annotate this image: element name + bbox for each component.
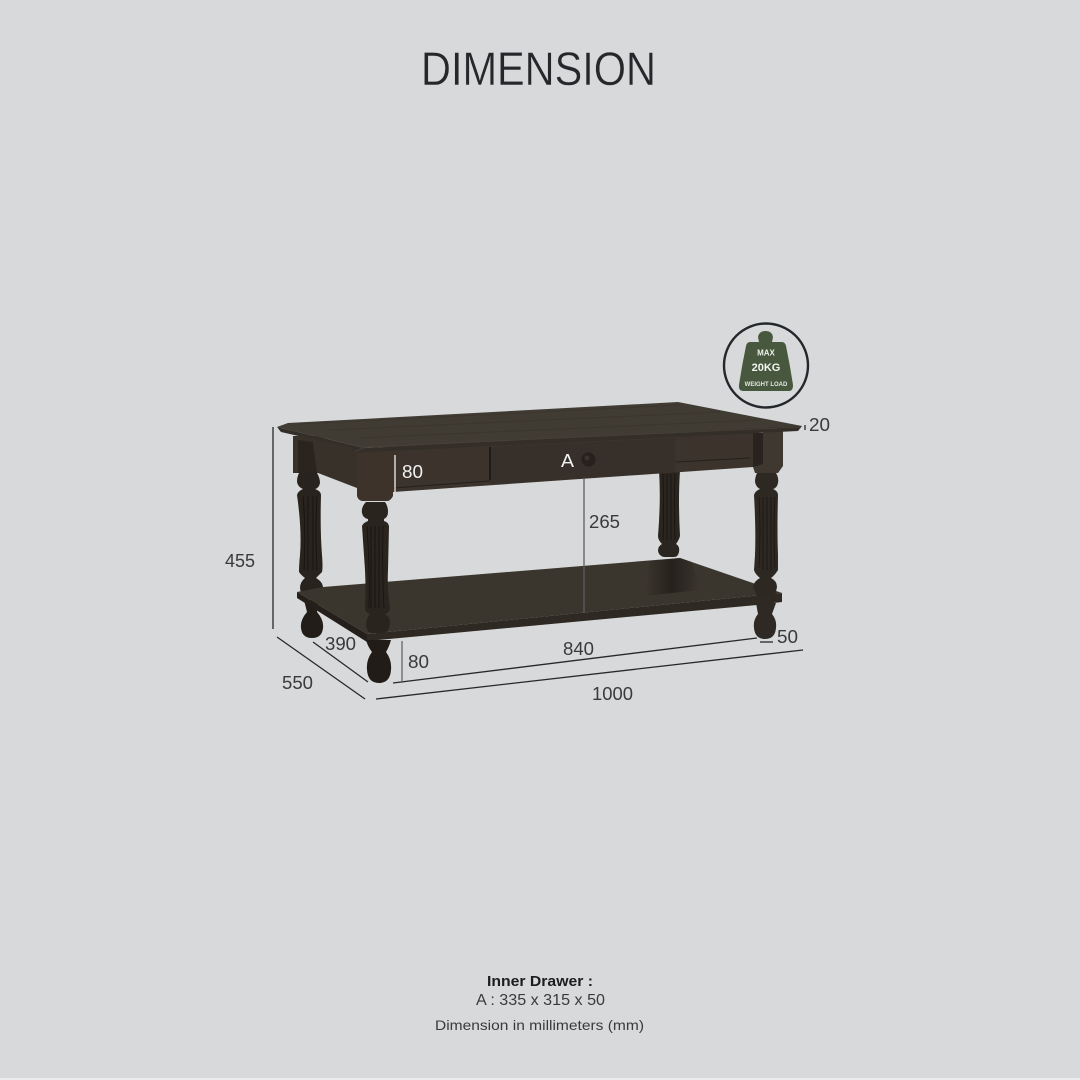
dimension labels: 455 (225, 551, 255, 571)
icon: max weight load badge: WEIGHT LOAD (745, 382, 788, 388)
dimension labels: 265 (589, 512, 620, 532)
drawer height line (583, 478, 585, 613)
dimension labels: 20 (809, 415, 830, 435)
table top (277, 402, 802, 453)
right front foot (754, 603, 776, 639)
right front leg (753, 473, 778, 596)
back left leg (297, 473, 323, 638)
dimension labels: 1000 (592, 684, 633, 704)
title: DIMENSION (421, 42, 656, 95)
coffee table illustration (277, 402, 802, 683)
dimension labels: 840 (563, 639, 594, 659)
dimension labels: 80 (408, 652, 429, 672)
icon: max weight load badge: MAX (757, 348, 776, 358)
icon: max weight load badge: 20KG (752, 362, 780, 374)
dimension labels: 80 (402, 462, 423, 482)
inner drawer note: Inner Drawer : (487, 973, 593, 990)
dimension labels: 50 (777, 627, 798, 647)
dimension lines (273, 425, 805, 699)
inner drawer note: Dimension in millimeters (mm) (435, 1017, 644, 1033)
icon: max weight load badge (724, 324, 808, 408)
dimension labels: A (561, 451, 574, 471)
inner drawer note: A : 335 x 315 x 50 (476, 992, 605, 1009)
dimension labels: 550 (282, 673, 313, 693)
inner drawer note (435, 973, 644, 1033)
apron and drawer (293, 431, 783, 501)
dimension labels (225, 415, 830, 704)
apron height line (394, 455, 396, 492)
back right leg (658, 470, 680, 557)
dimension labels: 390 (325, 634, 356, 654)
left front leg and foot (362, 502, 391, 683)
